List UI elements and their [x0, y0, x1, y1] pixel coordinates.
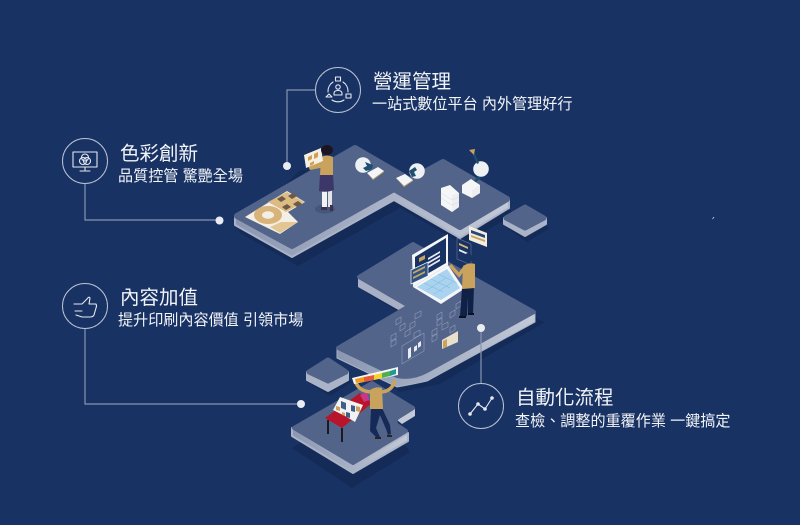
flow diagram on floor: [391, 301, 461, 364]
heading: content value: 提升印刷內容價值 引領市場: [118, 312, 303, 329]
icon: monitor with colour circles: [62, 138, 108, 184]
floor artwork: colour proofs: [245, 191, 305, 234]
icon: line trend: [458, 384, 504, 428]
heading: colour innovation: 色彩創新: [120, 143, 198, 165]
person: man holding colour strip at table: [325, 367, 398, 442]
icon: people cycle: [316, 68, 360, 112]
heading: automated workflow: [515, 387, 731, 430]
connector: automated workflow: [477, 324, 485, 383]
connector: operations management: [283, 90, 315, 170]
heading: operations management: [372, 71, 572, 113]
heading: operations management: 營運管理: [373, 71, 451, 93]
heading: colour innovation: 品質控管 驚艷全場: [118, 167, 243, 185]
platform: middle deck: [337, 244, 545, 392]
paper stacks: [441, 179, 480, 212]
connector: content value: [85, 329, 305, 408]
heading: operations management: 一站式數位平台 內外管理好行: [372, 95, 572, 113]
connector: colour innovation: [85, 183, 224, 224]
platform: small tile lower left: [307, 360, 352, 396]
heading: automated workflow: 自動化流程: [516, 387, 614, 409]
laptop with floating panels: [411, 226, 487, 304]
platform: lower deck: [292, 383, 415, 488]
person: woman holding a print: [304, 145, 335, 214]
heading: automated workflow: 查檢、調整的重覆作業 一鍵搞定: [515, 413, 731, 430]
platform: small tile upper right: [504, 207, 550, 242]
person: man operating laptop: [450, 253, 475, 318]
heading: content value: 內容加值: [120, 287, 198, 309]
heading: content value: [118, 287, 303, 329]
robot arms with paper sheets: [355, 149, 489, 187]
icon: thumbs up: [62, 284, 108, 328]
platform: upper L-shaped deck: [235, 148, 516, 266]
heading: colour innovation: [118, 143, 243, 185]
